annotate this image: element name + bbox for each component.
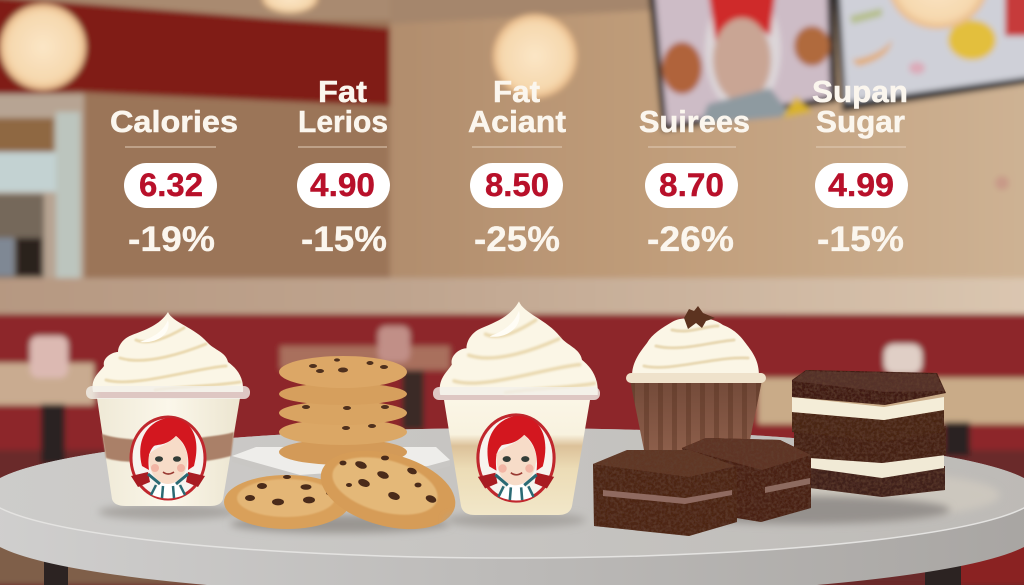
heading: Sugar bbox=[816, 104, 905, 139]
heading: Lerios bbox=[298, 104, 388, 139]
column: fat aciant bbox=[468, 74, 566, 259]
floor patch right bbox=[950, 500, 1024, 585]
brownie top bbox=[593, 450, 736, 477]
cookie 3 bbox=[279, 401, 407, 425]
cup shadow bbox=[98, 504, 238, 520]
cup rim bbox=[433, 387, 600, 400]
chocolate cup with whipped cream bbox=[626, 306, 766, 450]
whipped topping bbox=[92, 312, 243, 392]
ceiling lamp right bbox=[888, 0, 988, 29]
back brownie bbox=[682, 438, 811, 522]
lower cream bbox=[810, 455, 944, 478]
heading bbox=[298, 74, 388, 139]
percent change: -26% bbox=[647, 220, 734, 259]
left wall bbox=[0, 0, 392, 290]
wall TV with mascot bbox=[645, 0, 838, 132]
heading bbox=[812, 74, 908, 139]
second slab bbox=[792, 410, 944, 442]
chocolate topping bbox=[684, 306, 715, 329]
wall ledge bbox=[0, 278, 1024, 316]
layered brownie stack bbox=[792, 370, 946, 497]
middle slab bbox=[794, 426, 946, 463]
flat cookie bbox=[224, 475, 350, 529]
table rim bbox=[0, 428, 1024, 585]
floor backing bbox=[0, 440, 1024, 585]
column: calories bbox=[110, 104, 238, 259]
heading bbox=[468, 74, 566, 139]
cup rim bbox=[86, 386, 250, 399]
value pill bbox=[470, 163, 563, 208]
value pill bbox=[124, 163, 217, 208]
cookie stack bbox=[279, 356, 407, 465]
cup of whipped dessert with logo, centre bbox=[433, 301, 600, 528]
red lower wall bbox=[0, 314, 1024, 454]
bottom slab bbox=[810, 466, 945, 497]
heading: Calories bbox=[110, 104, 238, 139]
table edge highlight bbox=[0, 493, 1024, 558]
value: 4.99 bbox=[828, 167, 894, 203]
right wall bbox=[390, 0, 1024, 290]
whipped topping bbox=[440, 301, 598, 395]
red wall band bbox=[0, 0, 390, 106]
cup rim bbox=[626, 373, 766, 383]
whipped topping bbox=[632, 318, 759, 376]
column: suirees bbox=[639, 104, 750, 259]
brownie shadows bbox=[650, 496, 950, 524]
heading: Aciant bbox=[468, 104, 566, 139]
top face bbox=[792, 371, 944, 392]
value: 8.70 bbox=[659, 167, 724, 203]
table top bbox=[0, 428, 1024, 558]
cup of whipped dessert with logo, left bbox=[86, 312, 250, 520]
cup ribs bbox=[630, 380, 762, 450]
wendy logo bbox=[478, 415, 554, 501]
cup shadow bbox=[446, 512, 586, 528]
table sheen bbox=[760, 473, 1000, 517]
serving plate bbox=[232, 447, 450, 482]
brownie filling bbox=[603, 490, 732, 504]
round table bbox=[0, 428, 1024, 585]
chocolate layer bbox=[102, 432, 234, 462]
floor patch left bbox=[0, 530, 260, 585]
table leg left bbox=[44, 540, 68, 585]
upper cream bbox=[792, 397, 944, 420]
wall menu screen bbox=[832, 0, 1024, 112]
floor area bbox=[0, 450, 1024, 585]
column: supan sugar bbox=[812, 74, 908, 259]
brownie filling bbox=[765, 478, 810, 493]
front cookies bbox=[224, 437, 464, 543]
background vases bbox=[30, 326, 922, 378]
percent change: -15% bbox=[817, 220, 904, 259]
percent change: -25% bbox=[474, 220, 560, 259]
window frame bbox=[0, 94, 84, 284]
front brownie bbox=[593, 450, 737, 536]
heading: Supan bbox=[812, 74, 908, 109]
tilted cookie bbox=[312, 437, 464, 543]
value: 4.90 bbox=[310, 167, 375, 203]
chocolate chips bbox=[302, 358, 389, 430]
ceiling strip right bbox=[390, 0, 660, 24]
brownie body bbox=[593, 464, 737, 536]
brownie top bbox=[682, 438, 811, 470]
percent change: -15% bbox=[301, 220, 387, 259]
cup body bbox=[630, 380, 762, 450]
top slab bbox=[792, 370, 946, 405]
percent change: -19% bbox=[128, 220, 215, 259]
heading: Suirees bbox=[639, 104, 750, 139]
value pill bbox=[297, 163, 390, 208]
wall mark bbox=[995, 176, 1009, 190]
cup body bbox=[97, 398, 240, 506]
heading: Fat bbox=[318, 74, 367, 109]
heading: Fat bbox=[493, 74, 540, 109]
cream swirl bbox=[644, 326, 748, 367]
column: fat lerios bbox=[297, 74, 390, 259]
value pill bbox=[645, 163, 738, 208]
cookie 1 bbox=[279, 356, 407, 388]
pendant lamps bbox=[0, 0, 577, 98]
value: 8.50 bbox=[485, 167, 549, 203]
background tables bbox=[0, 346, 1024, 464]
value: 6.32 bbox=[139, 167, 203, 203]
value pill bbox=[815, 163, 908, 208]
table leg right bbox=[925, 540, 961, 585]
cookie shadow bbox=[230, 515, 450, 533]
cookie 5 bbox=[279, 439, 407, 465]
cookie 4 bbox=[279, 419, 407, 445]
wendy logo bbox=[131, 417, 205, 499]
ceiling strip left bbox=[0, 0, 392, 20]
cookie 2 bbox=[279, 383, 407, 405]
brownie body bbox=[682, 438, 811, 522]
plate surface bbox=[232, 447, 450, 475]
plate rim bbox=[232, 456, 450, 482]
cup body bbox=[444, 400, 590, 515]
